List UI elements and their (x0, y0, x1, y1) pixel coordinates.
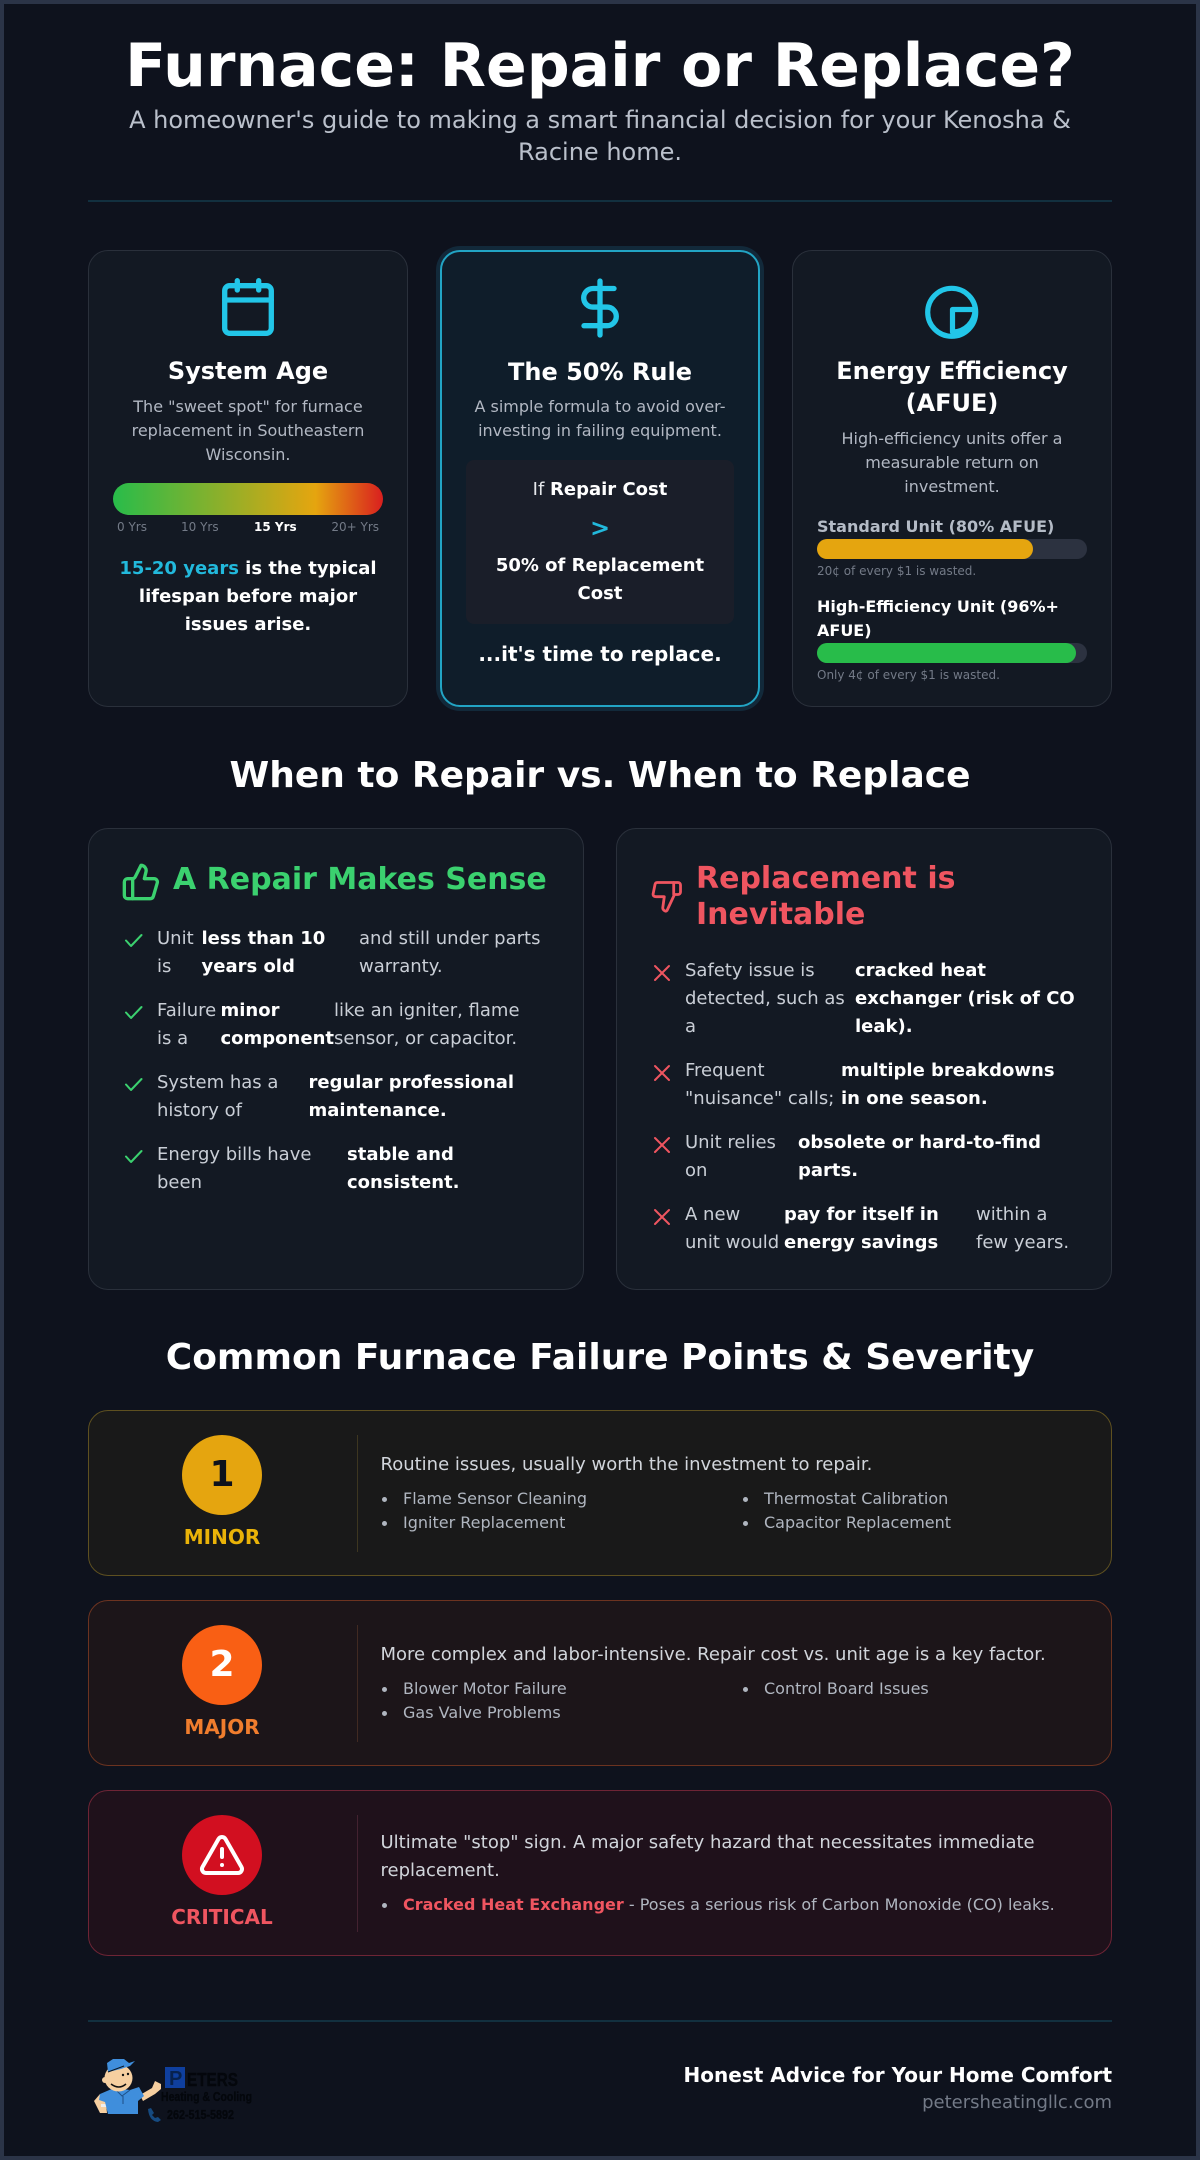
list item: multiple breakdowns (841, 1060, 1055, 1081)
description (842, 429, 1062, 496)
list item: cracked heat (855, 960, 986, 981)
lifespan statement: 15-20 years is the typical (119, 558, 377, 579)
subtitle: A homeowner's guide to making a smart financial decision for your Kenosha & (129, 106, 1071, 134)
list item: been (157, 1172, 202, 1193)
description: A simple formula to avoid over- (474, 397, 726, 416)
panel: 50% rule (440, 250, 760, 707)
list item (654, 960, 1075, 1037)
failure list: Control Board Issues (764, 1679, 929, 1698)
list item: Frequent (685, 1060, 764, 1081)
failure list: Gas Valve Problems (403, 1703, 561, 1722)
badge: 2 (182, 1625, 262, 1705)
list item: in one season. (841, 1088, 988, 1109)
heading (696, 861, 955, 932)
subtitle (129, 106, 1071, 166)
description: Wisconsin. (206, 445, 290, 464)
company name letters: ETERS (187, 2070, 238, 2090)
greater-than symbol: > (590, 514, 610, 542)
progress bar (817, 643, 1087, 663)
list item: A new (685, 1204, 740, 1225)
severity row: minor (88, 1410, 1112, 1576)
icon: dollar (581, 278, 619, 338)
heading: Energy Efficiency (836, 357, 1068, 385)
website: petersheatingllc.com (922, 2092, 1112, 2113)
icon: phone (148, 2108, 161, 2122)
list item: history of (157, 1100, 242, 1121)
bar: standard unit (817, 517, 1087, 578)
lifespan statement: issues arise. (185, 614, 311, 635)
list item (125, 1072, 514, 1121)
list item: within a (976, 1204, 1047, 1225)
list item: parts. (798, 1160, 858, 1181)
list item: Unit relies (685, 1132, 776, 1153)
description: replacement. (380, 1860, 500, 1880)
age gradient bar (113, 483, 383, 515)
list item: years old (202, 956, 295, 977)
list item: maintenance. (308, 1100, 447, 1121)
icon: thumbs down (652, 881, 682, 913)
icon: x (654, 1065, 670, 1081)
list item: and still under parts (359, 928, 540, 949)
list item: Safety issue is (685, 960, 815, 981)
list item: unit would (685, 1232, 779, 1253)
icon: x (654, 965, 670, 981)
formula line: replacement cost: Cost (578, 583, 622, 604)
description: investment. (904, 477, 1000, 496)
failure list (382, 1679, 929, 1722)
mascot (94, 2059, 161, 2114)
icon: warning triangle (200, 1835, 244, 1875)
label: AFUE) (817, 621, 872, 640)
description: investing in failing equipment. (478, 421, 722, 440)
badge: 1 (182, 1435, 262, 1515)
description: Routine issues, usually worth the investment to repair. (380, 1454, 872, 1475)
age scale labels: 15 Yrs (254, 520, 297, 534)
label: CRITICAL (171, 1905, 273, 1929)
subtitle: Racine home. (518, 138, 682, 166)
label: MINOR (184, 1525, 260, 1549)
severity row: critical (88, 1790, 1112, 1956)
label: MAJOR (184, 1715, 260, 1739)
badge: 1: 1 (209, 1454, 235, 1495)
list item: minor (220, 1000, 279, 1021)
description: measurable return on (865, 453, 1039, 472)
list item: component (220, 1028, 334, 1049)
failure list (382, 1489, 951, 1532)
list item: exchanger (risk of CO (855, 988, 1075, 1009)
tagline: Honest Advice for Your Home Comfort (684, 2063, 1112, 2087)
failure list: Blower Motor Failure (403, 1679, 567, 1698)
company name: P (169, 2068, 182, 2090)
list item: stable and (347, 1144, 454, 1165)
section heading: repair vs replace: When to Repair vs. When to Replace (229, 755, 970, 796)
panel: energy efficiency (792, 250, 1112, 707)
header (125, 31, 1075, 166)
list item: sensor, or capacitor. (334, 1028, 517, 1049)
heading: The 50% Rule (508, 358, 692, 386)
formula box (466, 460, 734, 624)
list item: energy savings (784, 1232, 938, 1253)
list item (654, 1060, 1055, 1109)
heading: System Age (168, 357, 328, 385)
description (132, 397, 364, 464)
section heading: failure points: Common Furnace Failure Points & Severity (166, 1337, 1034, 1378)
heading: Inevitable (696, 897, 865, 932)
icon: check (125, 1078, 142, 1091)
age scale labels: 10 Yrs (181, 520, 219, 534)
list item: "nuisance" calls; (685, 1088, 834, 1109)
formula line: replacement cost (496, 555, 704, 604)
list item: regular professional (308, 1072, 514, 1093)
list item (125, 1000, 520, 1049)
failure list: Thermostat Calibration (764, 1489, 948, 1508)
label: Standard Unit (80% AFUE) (817, 517, 1054, 536)
formula line: repair cost: If Repair Cost (533, 479, 667, 500)
list item: System has a (157, 1072, 278, 1093)
icon: check (125, 934, 142, 947)
icon: check (125, 1006, 142, 1019)
logo (90, 2050, 260, 2126)
footer text (600, 2061, 1112, 2117)
badge: 2: 2 (209, 1644, 235, 1685)
age scale labels: 0 Yrs (117, 520, 147, 534)
panel: system age (88, 250, 408, 707)
list item (654, 1204, 1069, 1253)
list item: warranty. (359, 956, 443, 977)
description (474, 397, 726, 440)
list item: Energy bills have (157, 1144, 311, 1165)
description: High-efficiency units offer a (842, 429, 1062, 448)
list item (654, 1132, 1041, 1181)
list item: is a (157, 1028, 188, 1049)
label: High-Efficiency Unit (96%+ (817, 597, 1059, 616)
list item: Failure (157, 1000, 216, 1021)
list item: leak). (855, 1016, 913, 1037)
list item: like an igniter, flame (334, 1000, 520, 1021)
icon: x (654, 1137, 670, 1153)
failure list: Cracked Heat Exchanger - Poses a serious risk of Carbon Monoxide (CO) leaks. (403, 1895, 1055, 1914)
list item: few years. (976, 1232, 1069, 1253)
heading: (AFUE) (906, 389, 998, 417)
list item: obsolete or hard-to-find (798, 1132, 1041, 1153)
description (380, 1832, 1035, 1880)
conclusion: ...it's time to replace. (478, 642, 722, 666)
list item: detected, such as (685, 988, 845, 1009)
severity row: major (88, 1600, 1112, 1766)
label (817, 597, 1059, 640)
icon: pie chart (925, 286, 978, 339)
bar: high efficiency unit (817, 597, 1087, 682)
icon: thumbs up (122, 864, 160, 900)
heading (836, 357, 1068, 417)
list item: pay for itself in (784, 1204, 939, 1225)
formula line: replacement cost: 50% of Replacement (496, 555, 704, 576)
description: Ultimate "stop" sign. A major safety hazard that necessitates immediate (380, 1832, 1035, 1852)
heading: A Repair Makes Sense (173, 862, 547, 897)
failure list: Igniter Replacement (403, 1513, 565, 1532)
list item (125, 928, 540, 977)
list item: is (157, 956, 171, 977)
list item: Unit (157, 928, 194, 949)
description: The "sweet spot" for furnace (133, 397, 363, 416)
list item: less than 10 (202, 928, 325, 949)
panel: repair (88, 828, 584, 1290)
age scale labels (117, 520, 379, 534)
lifespan statement: lifespan before major (139, 586, 357, 607)
age scale labels: 20+ Yrs (331, 520, 379, 534)
lifespan statement (119, 558, 377, 635)
description: More complex and labor-intensive. Repair cost vs. unit age is a key factor. (380, 1644, 1046, 1665)
caption: 20¢ of every $1 is wasted. (817, 564, 976, 578)
badge: warning (182, 1815, 262, 1895)
panel: replace (616, 828, 1112, 1290)
list item (125, 1144, 460, 1193)
failure list: Capacitor Replacement (764, 1513, 951, 1532)
icon: x (654, 1209, 670, 1225)
description: replacement in Southeastern (132, 421, 364, 440)
progress bar (817, 539, 1087, 559)
logo mark (165, 2067, 185, 2088)
icon: check (125, 1150, 142, 1163)
title: Furnace: Repair or Replace? (125, 31, 1075, 101)
failure list: Flame Sensor Cleaning (403, 1489, 587, 1508)
phone number: 262-515-5892 (167, 2107, 234, 2122)
heading: Replacement is (696, 861, 955, 896)
list item: consistent. (347, 1172, 460, 1193)
list item: on (685, 1160, 707, 1181)
list item: a (685, 1016, 696, 1037)
caption: Only 4¢ of every $1 is wasted. (817, 668, 1000, 682)
icon: calendar (222, 278, 274, 336)
